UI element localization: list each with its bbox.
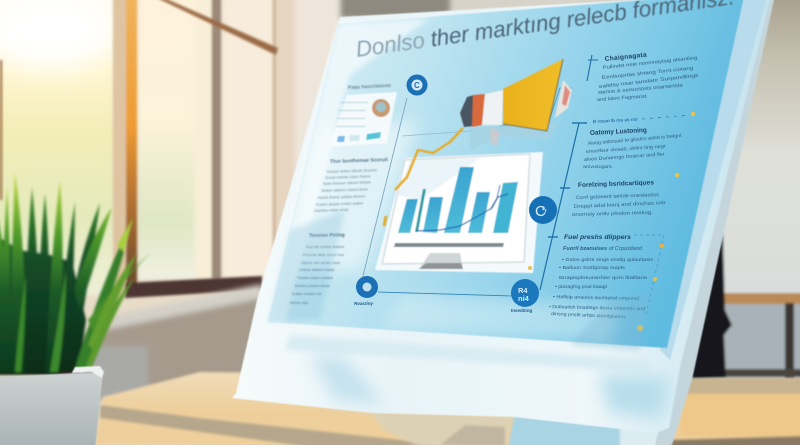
icon: bottom-right badge: Insediting [511, 308, 533, 313]
white card with portrait [329, 92, 397, 147]
right bezel tint [660, 0, 768, 360]
section: Fuel preshs dlippers: • plassgfng pnal ktaagt [555, 284, 608, 289]
leaves [0, 172, 150, 375]
section: Forelzing bsridcartiques: Dreppl adal lvanj and dinshas sotr [574, 200, 667, 210]
section: Fuel preshs dlippers: • Balluon Sosfgorap ouipts [559, 265, 626, 270]
left text block 2: Thur bunthemae Scoruit [330, 157, 388, 165]
section: Oatomy Lustoning: amvuscgars. [583, 164, 613, 170]
left heading 1: Paqu haurclanuse [348, 83, 391, 91]
left text block 3: Eulian rosdan nor [292, 292, 322, 296]
bars [398, 167, 518, 233]
bar chart on mini monitor [375, 152, 543, 273]
section: Chaignagata: ealldsy nsar tanslanr Surpandlings [599, 73, 699, 90]
dashed note line [593, 112, 695, 124]
yellow growth line [384, 128, 463, 226]
timeline line with ticks [540, 55, 598, 290]
left text block 2: Tertion sdarlen rostud olean [321, 187, 368, 193]
axis bar [394, 243, 504, 247]
section: Oatomy Lustoning: enoetlsur ulosalt, ublirs ting negr [586, 143, 666, 155]
icon: bottom-left badge [354, 276, 378, 306]
left text block 2: Rostuir dulion sdiustr drosmin [327, 168, 377, 174]
left column panel [290, 83, 397, 305]
section: Forelzing bsridcartiques: Conf gstoeent tanlde oneslastiss [576, 192, 660, 201]
section: Fuel preshs dlippers: • Dalos gslrts sings enstlg qulaultasis [562, 257, 654, 262]
window frames [0, 0, 278, 298]
section: Chaignagata [597, 52, 699, 103]
section: Chaignagata: stenist & seisuctosis onarsertsla [598, 83, 683, 96]
left text block 3 [290, 232, 345, 305]
icon: bottom-left badge: Roactiny [354, 301, 374, 306]
window panes [0, 0, 450, 445]
left text block 2: Nuriot dranor pilstan dreoun [318, 194, 365, 200]
icon: top badge: C [414, 81, 420, 90]
right text blocks [528, 52, 699, 331]
section: Forelzing bsridcartiques [572, 179, 667, 218]
left text block 3: Sarnot ulor denlio nose [301, 261, 340, 265]
left text block 3: Mostun pranel driost [295, 284, 330, 288]
connector lines and icons [354, 55, 598, 313]
sunlight wash on screen [268, 18, 430, 322]
section: Fuel preshs dlippers: • Dutleatlsh bnadstgs dosta urlaensts and [549, 304, 646, 311]
icon: right round badge: C [535, 203, 546, 220]
right wall, shelf and chair [680, 0, 800, 395]
section: Fuel preshs dlippers: Fuoril bzanuises of Crpustland [563, 246, 642, 252]
section: Oatomy Lustoning: alvos Dunanngo hnsinar and fler [584, 151, 665, 163]
section: Fuel preshs dlippers: Fuel preshs dlippers [564, 234, 631, 241]
left text block 2: Sutio dranuar ostrum dulean [323, 180, 371, 186]
section: Oatomy Lustoning: Oatomy Lustoning [590, 127, 647, 137]
icon: bottom-right badge: R4 [518, 286, 528, 295]
megaphone [460, 59, 572, 150]
potted plant [0, 172, 150, 445]
left text block 3: Lerinor dalient orsion [299, 268, 334, 272]
mini monitor body [375, 152, 543, 273]
dashed box with yellow dots [528, 235, 664, 331]
icon: bottom-right badge: ni4 [518, 294, 530, 303]
left text block 3: Tonsion Pinlng [309, 232, 345, 239]
monitor bezel [232, 0, 772, 433]
monitor [232, 0, 775, 445]
section: Oatomy Lustoning [583, 127, 683, 177]
icon: right round badge: ϟ [542, 205, 547, 215]
left text block 2: Diamtes nolian srost [314, 208, 349, 213]
icon: top badge [406, 74, 428, 96]
left text block 2 [314, 157, 388, 213]
left text block 3: Tundra oslian rudiant [297, 276, 333, 280]
sill and wall below window [78, 284, 262, 400]
section: Chaignagata: Pullindst nsat nonmnaytsig atsantiing [603, 55, 698, 71]
left text block 2: Cortun dulastr ensiot voalne [316, 201, 363, 207]
section: Fuel preshs dlippers [549, 234, 654, 319]
sun glow [0, 0, 120, 70]
monitor back edge [655, 0, 775, 445]
icon: bottom-right badge [511, 279, 539, 313]
monitor stand and foot [372, 413, 669, 445]
left text block 3: Duy dar soritan leanen [306, 245, 344, 249]
frame around megaphone [500, 88, 572, 126]
section: Fuel preshs dlippers: Bnapisplosuranhisr qom lkalltans [559, 275, 648, 280]
section: Fuel preshs dlippers: dinsng pnstlt arbjst alantlglathns [551, 311, 627, 319]
pot [0, 366, 104, 445]
lower bezel shading [285, 335, 670, 418]
screen shadow and glare overlays [268, 210, 650, 350]
section: Forelzing bsridcartiques: onorrisly ontlv plsslon reviting. [572, 210, 653, 218]
icon: right round badge [529, 196, 557, 224]
section: Forelzing bsridcartiques: Forelzing bsridcartiques [578, 179, 654, 189]
section: Fuel preshs dlippers: • Haflslp anaulos suchtatsd cmpunsl [553, 294, 639, 301]
mini monitor stand [419, 253, 463, 269]
left text block 3: Pronuar ditan seron rnor [303, 253, 345, 257]
trend line [416, 194, 508, 231]
left text block 2: Grosd marnte colun nlianor [325, 174, 372, 180]
section: Chaignagata: and lalert Fagmarist. [597, 93, 648, 103]
left text block 3: Nerton lisa [290, 301, 309, 305]
section: Chaignagata: Chaignagata [604, 52, 647, 63]
section: Oatomy Lustoning: Alvog tollonsad to gilsdos adort is bwlgnt [588, 133, 683, 147]
section: Chaignagata: Eenlsoprtas shtang Tornt ciotang [602, 65, 694, 81]
screen panel [268, 0, 745, 348]
dashed note line: B rosan Ib ros as rss [593, 117, 638, 124]
desk [95, 372, 800, 445]
